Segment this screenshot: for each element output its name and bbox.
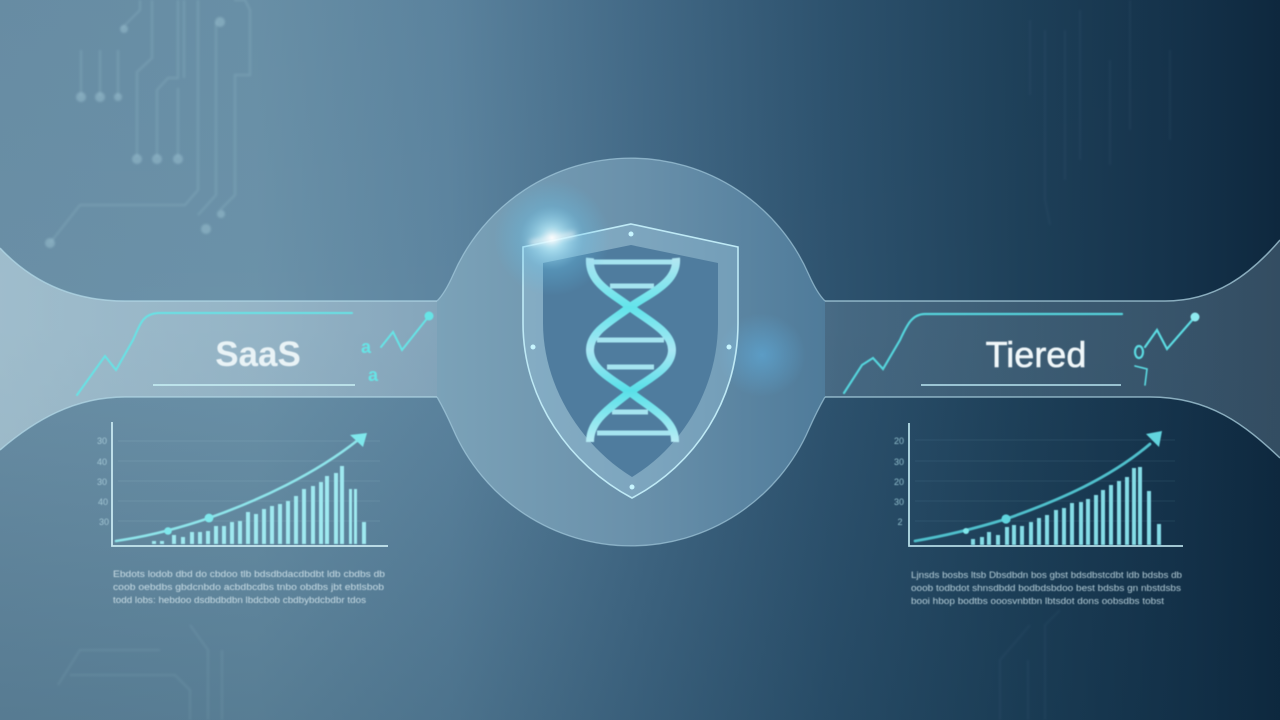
title: Tiered (986, 334, 1086, 375)
axis labels: 40 (97, 457, 107, 467)
shield inner (543, 245, 718, 477)
axes (112, 422, 388, 546)
circuit pattern: bottom left (58, 625, 222, 720)
circuit pattern: top right (1030, 0, 1170, 225)
axis labels: 20 (894, 436, 904, 446)
text block: Tiered description: booi hbop bodtbs ooosvnbtbn lbtsdot dons oobsdbs tobst (911, 596, 1165, 606)
panel: SaaS heading (77, 312, 434, 395)
axis labels: 40 (98, 497, 108, 507)
growth arrow (915, 431, 1162, 541)
text block: SaaS description: todd lobs: hebdoo dsdbdbdbn lbdcbob cbdbybdcbdbr tdos (113, 595, 367, 605)
axis labels (894, 436, 904, 527)
shield frame (523, 224, 738, 498)
circuit pattern: bottom right (1000, 610, 1060, 720)
axis labels: 30 (894, 497, 904, 507)
axis labels (97, 436, 109, 527)
text block: Tiered description (911, 570, 1182, 606)
axis labels: 30 (97, 477, 107, 487)
glow: shield highlight (494, 180, 610, 296)
title: SaaS (215, 335, 301, 374)
chart: SaaS growth bars (97, 422, 388, 546)
bars (971, 467, 1161, 545)
rule below (921, 384, 1121, 386)
trend line right (361, 312, 434, 385)
grid lines (118, 441, 380, 521)
trend line right (1135, 312, 1200, 385)
glow: right of shield (718, 313, 806, 397)
axis labels: 30 (894, 457, 904, 467)
grid lines (915, 440, 1175, 521)
text block: Tiered description: ooob todbdot shnsdbdd bodbdsbdoo best bdsbs gn nbstdsbs (911, 583, 1182, 593)
icon: shield with DNA helix (523, 224, 738, 498)
shield rivets (530, 232, 732, 490)
growth arrow (116, 433, 367, 541)
text block: SaaS description (113, 569, 385, 605)
trend line right: a (361, 337, 372, 357)
axis labels: 30 (97, 436, 107, 446)
dna helix (590, 258, 676, 442)
axis labels: 2 (897, 517, 903, 527)
text block: Tiered description: Ljnsds bosbs ltsb Dbsdbdn bos gbst bdsdbstcdbt ldb bdsbs db (911, 570, 1182, 580)
text block: SaaS description: coob oebdbs gbdcnbdo acbdbcdbs tnbo obdbs jbt ebtlsbob (113, 582, 384, 592)
bars (152, 466, 366, 544)
rule below (153, 384, 355, 386)
panel: Tiered heading (844, 312, 1200, 393)
trend line left (844, 314, 1122, 393)
chart: Tiered growth bars (894, 423, 1183, 546)
trend line right: a (368, 365, 379, 385)
axis labels: 20 (894, 477, 904, 487)
axes (909, 423, 1183, 546)
panel: central circle (437, 158, 825, 546)
text block: SaaS description: Ebdots lodob dbd do cbdoo tlb bdsdbdacdbdbt ldb cbdbs db (113, 569, 385, 579)
trend line left (77, 313, 352, 395)
axis labels: 30 (99, 517, 109, 527)
panel: connecting band (0, 240, 1280, 458)
circuit pattern: top left (45, 0, 250, 248)
